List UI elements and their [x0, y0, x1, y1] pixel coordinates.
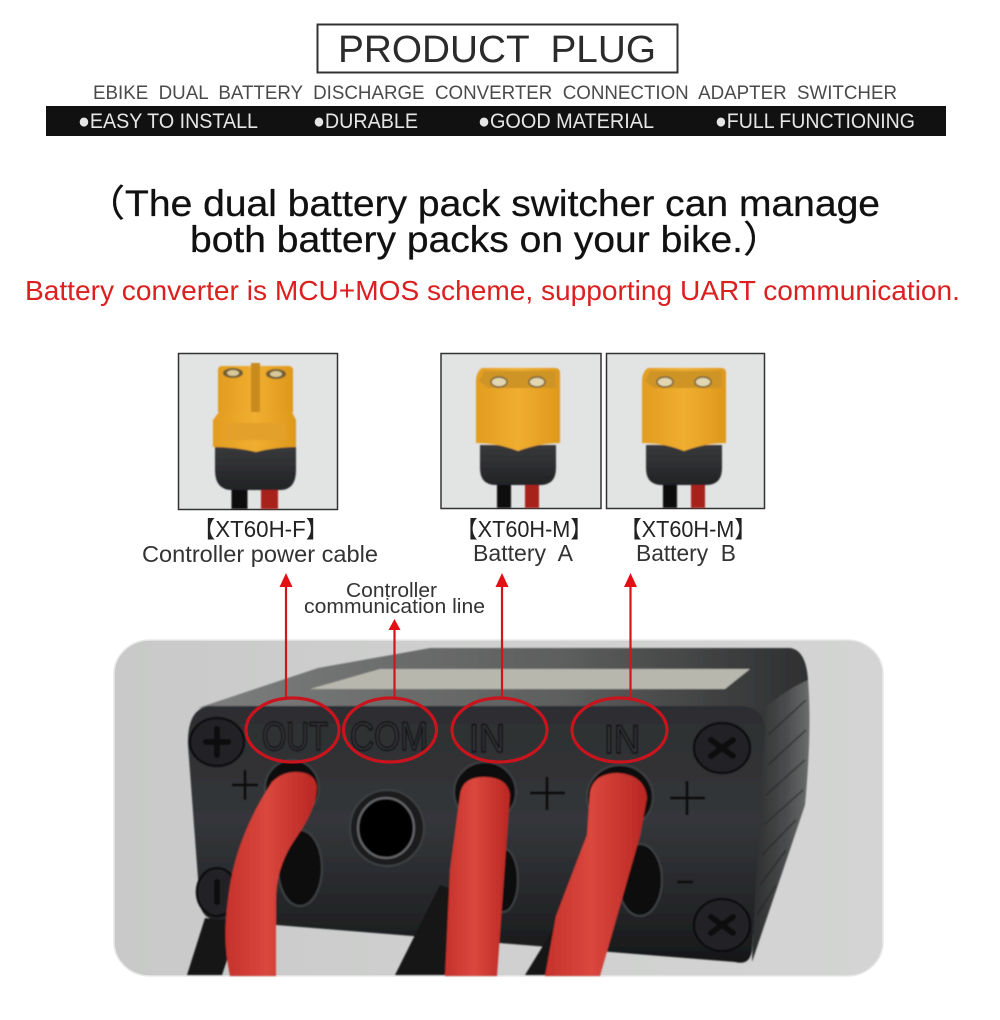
- embossed port labels: OUT: [262, 715, 328, 759]
- label: controller power cable: [142, 516, 378, 567]
- polarity marks: [232, 770, 705, 882]
- label: controller power cable: 【XT60H-F】: [193, 516, 328, 542]
- callout circle: IN battery B: [572, 698, 667, 762]
- device side: [752, 680, 809, 962]
- subtitle: EBIKE DUAL BATTERY DISCHARGE CONVERTER CONNECTION ADAPTER SWITCHER: [93, 83, 897, 104]
- label: controller communication line: Controller: [346, 580, 437, 602]
- embossed port labels: IN: [469, 717, 505, 761]
- screws: [190, 718, 750, 951]
- red cable: OUT: [225, 772, 317, 976]
- label: battery B: [620, 516, 756, 566]
- thumbnail: XT60H-F connector: [178, 354, 338, 510]
- feature: easy to install: ●EASY TO INSTALL: [78, 110, 258, 133]
- port recesses: [265, 760, 662, 916]
- heading: both battery packs on your bike.）: [190, 219, 782, 260]
- device side ribs: [757, 700, 806, 915]
- title: PRODUCT PLUG: PRODUCT PLUG: [338, 29, 656, 71]
- arrow: OUT to controller power cable: [280, 573, 292, 698]
- red cable: IN battery B: [545, 773, 647, 976]
- red cable: IN battery A: [445, 777, 510, 976]
- feature: full functioning: ●FULL FUNCTIONING: [715, 110, 915, 133]
- heading: [86, 183, 880, 260]
- arrow: COM to communication line: [388, 619, 400, 698]
- label: battery B: 【XT60H-M】: [620, 516, 756, 542]
- arrow: IN to battery B: [624, 573, 637, 698]
- label: battery A: [456, 516, 592, 566]
- label: controller communication line: communication line: [304, 596, 485, 618]
- panel: device photo: [114, 640, 883, 976]
- label: controller power cable: Controller power cable: [142, 541, 378, 567]
- callout circle: COM: [344, 698, 436, 762]
- label: battery A: Battery A: [473, 540, 574, 566]
- COM port hole: [350, 790, 424, 866]
- arrow: IN to battery A: [496, 573, 508, 698]
- feature: good material: ●GOOD MATERIAL: [478, 110, 654, 133]
- callout circle: OUT: [246, 698, 339, 762]
- device front face: [188, 706, 765, 963]
- embossed port labels: [262, 715, 640, 762]
- callout circle: IN battery A: [452, 698, 547, 762]
- label: battery B: Battery B: [636, 540, 736, 566]
- label: controller communication line: [304, 580, 485, 618]
- red note: Battery converter is MCU+MOS scheme, supporting UART communication.: [25, 275, 960, 306]
- thumbnail: XT60H-M battery B connector: [606, 354, 764, 508]
- device top surface: [198, 648, 808, 960]
- thumbnail: XT60H-M battery A connector: [441, 354, 601, 508]
- device label plate: [310, 669, 750, 689]
- embossed port labels: COM: [350, 715, 428, 759]
- embossed port labels: IN: [604, 718, 640, 762]
- heading: （The dual battery pack switcher can manage: [86, 183, 880, 224]
- feature: durable: ●DURABLE: [313, 110, 418, 133]
- label: battery A: 【XT60H-M】: [456, 516, 592, 542]
- black cables: [187, 885, 580, 975]
- feature bar: [46, 106, 946, 136]
